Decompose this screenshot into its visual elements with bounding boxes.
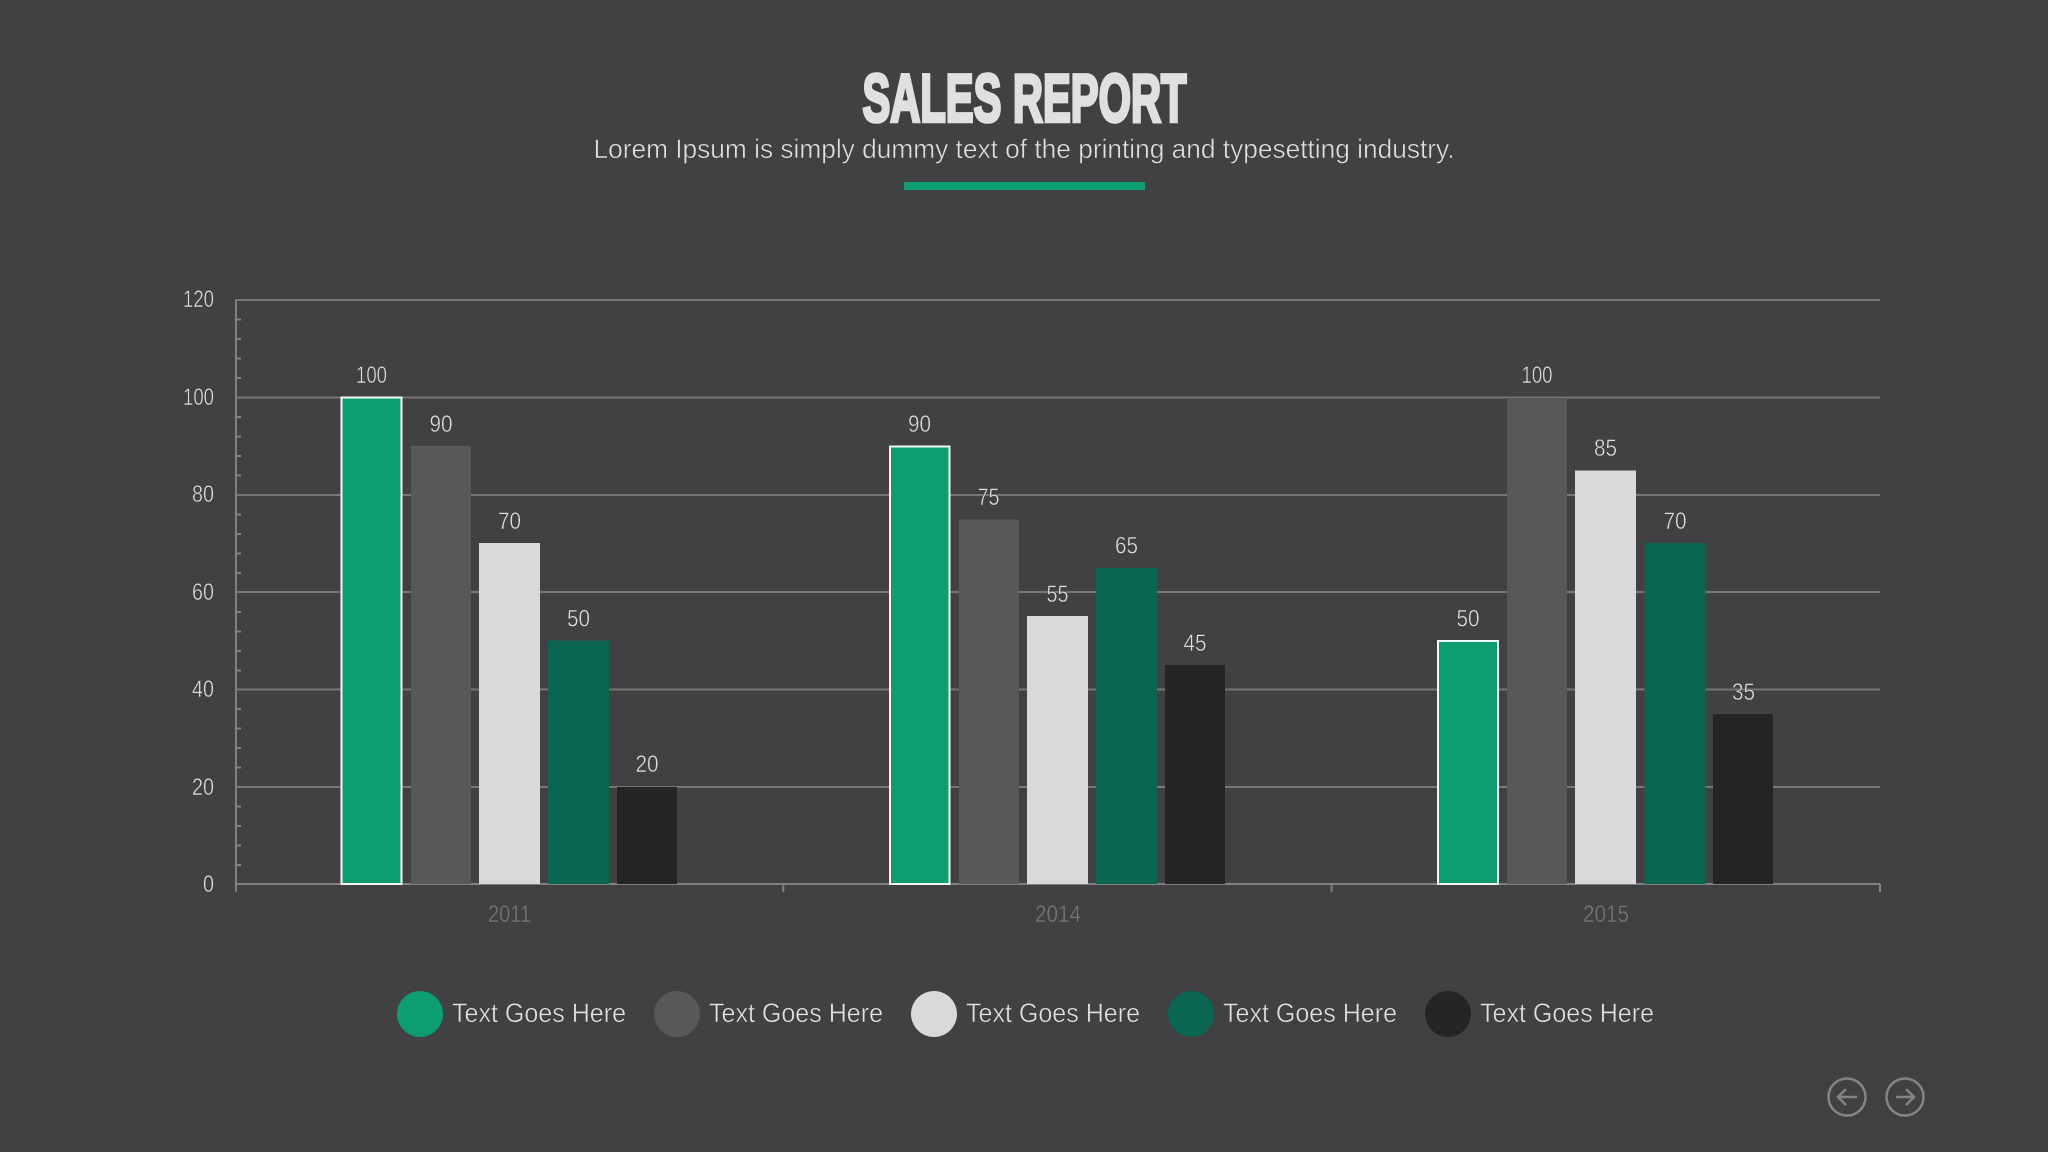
x axis labels [488,901,1629,928]
bar group: 2014: 90 [908,411,931,438]
bar group: 2015 [1438,362,1773,884]
legend item 3 [911,991,1140,1037]
x axis labels: 2015 [1583,901,1629,928]
x axis labels: 2011 [488,901,531,928]
y axis labels: 100 [183,384,214,411]
bar group: 2015: 35 [1732,679,1755,706]
bar group: 2011 [342,362,677,884]
icon: next arrow [1886,1078,1924,1116]
legend [397,991,1654,1037]
legend item 3: Text Goes Here [966,998,1140,1028]
bar group: 2014: 75 [978,484,1000,511]
bar group: 2014: 45 [1184,630,1206,657]
y axis labels: 120 [183,286,214,313]
bar group: 2011: 50 [567,606,590,632]
y axis labels: 40 [192,676,214,703]
bar group: 2011: 100 [356,362,387,389]
legend item 1: Text Goes Here [452,998,626,1028]
y axis labels [183,286,214,898]
bar group: 2014: 55 [1046,581,1068,608]
title accent bar [904,182,1145,190]
legend item 4: Text Goes Here [1223,998,1397,1028]
y axis labels: 60 [192,579,214,606]
bar group: 2015: 70 [1664,508,1686,535]
bar group: 2011: 90 [430,411,452,438]
bar group: 2011: 20 [636,751,658,778]
y axis labels: 80 [192,481,214,508]
legend item 1 [397,991,626,1037]
y axis labels: 0 [203,871,214,898]
legend item 4 [1168,991,1397,1037]
legend item 5: Text Goes Here [1480,998,1654,1028]
subtitle: Lorem Ipsum is simply dummy text of the printing and typesetting industry. [594,134,1454,164]
bar group: 2015: 50 [1456,606,1480,632]
title: SALES REPORT [862,60,1186,136]
legend item 2 [654,991,883,1037]
bar chart [183,286,1880,928]
bar group: 2014 [890,411,1225,884]
bar group: 2011: 70 [498,508,521,535]
bar group: 2015: 100 [1522,362,1552,389]
legend item 5 [1425,991,1654,1037]
y axis labels: 20 [192,774,214,801]
x axis labels: 2014 [1035,901,1081,928]
bar group: 2015: 85 [1594,435,1617,462]
bar group: 2014: 65 [1115,532,1138,560]
chart grid and axes [235,300,1880,892]
icon: previous arrow [1828,1078,1866,1116]
legend item 2: Text Goes Here [709,998,883,1028]
